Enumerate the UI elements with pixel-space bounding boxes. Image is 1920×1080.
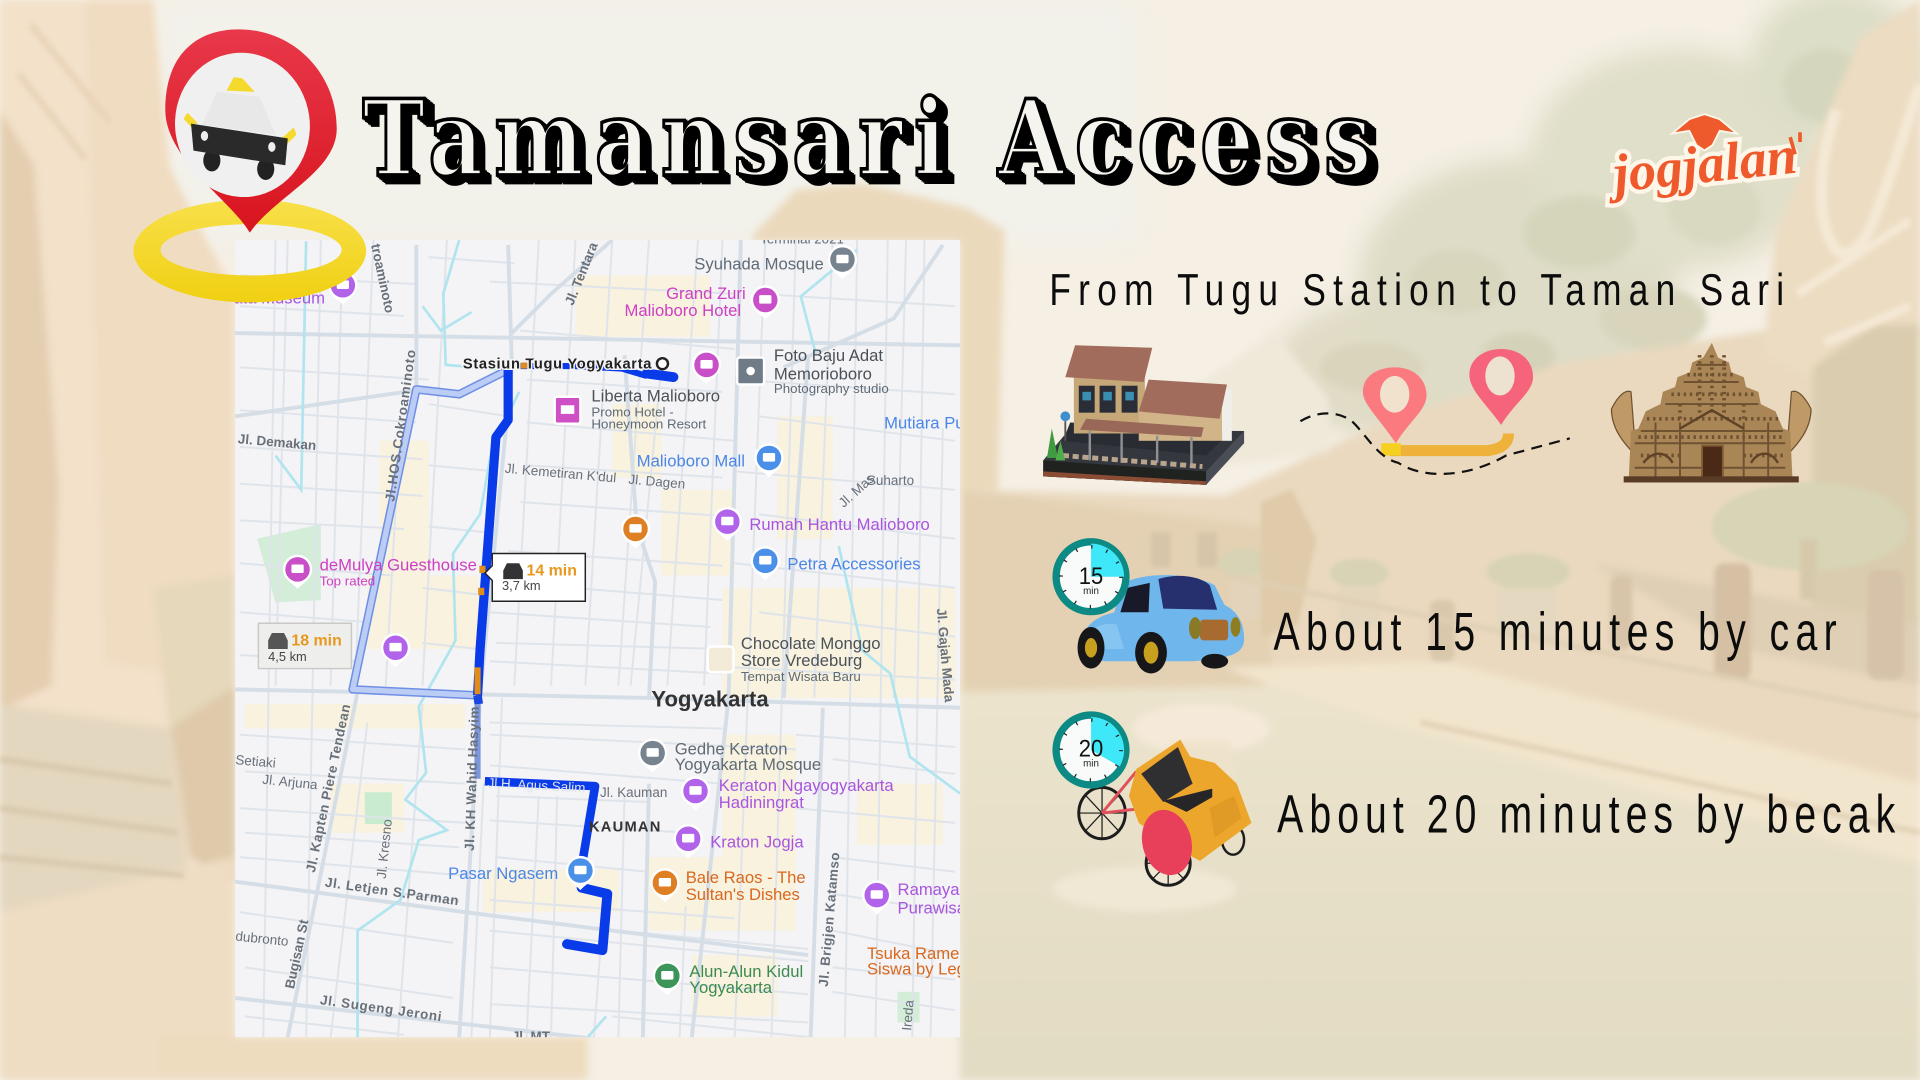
map place labels: Gedhe Keraton <box>675 739 788 758</box>
map street labels: Jl. Letjen S.Parman <box>324 875 460 908</box>
map place labels: KAUMAN <box>589 819 662 835</box>
map place labels: Photography studio <box>774 381 889 396</box>
route callout: 18 min: 4,5 km <box>268 649 307 664</box>
map rivers <box>276 240 960 1037</box>
route callout: 18 min: 18 min <box>291 632 342 649</box>
title: Tamansari Access <box>362 77 1371 201</box>
map pins <box>283 245 891 996</box>
map place labels: Kraton Jogja <box>710 832 804 851</box>
icon: blue car <box>1078 575 1244 673</box>
route callout: 14 min: 3,7 km <box>502 578 541 593</box>
map place labels: Chocolate Monggo <box>741 634 881 653</box>
map street labels: Jl. Brigjen Katamso <box>816 852 842 987</box>
map street labels: Ireda <box>899 999 917 1031</box>
icon: Tugu station building <box>1043 345 1244 485</box>
map place labels: Malioboro Hotel <box>624 301 741 320</box>
row: by car <box>1056 542 1837 673</box>
map place labels: Top rated <box>320 573 375 588</box>
route callout: 18 min <box>258 623 351 669</box>
map street labels: Jl. Gajah Mada <box>934 608 957 703</box>
map minor streets <box>240 240 955 1037</box>
main route <box>478 362 673 950</box>
icon: route pins with dashed path <box>1300 349 1570 474</box>
heading: from Tugu Station to Taman Sari: From Tugu Station to Taman Sari <box>1049 266 1784 315</box>
map street labels: Jl. Mas <box>836 471 878 510</box>
map place labels: Syuhada Mosque <box>694 254 824 273</box>
icon: 15 minute timer: min <box>1083 586 1099 597</box>
map street labels: Jl. Kapten Piere Tendean <box>303 703 353 874</box>
map street labels: Jl. Sugeng Jeroni <box>319 992 443 1024</box>
map place labels: Honeymoon Resort <box>591 417 707 432</box>
map place labels: Alun-Alun Kidul <box>689 962 803 981</box>
map place labels: Stasiun Tugu Yogyakarta <box>463 357 652 373</box>
map place labels: deMulya Guesthouse <box>320 556 477 575</box>
map street labels: Jl. Arjuna <box>262 772 319 792</box>
map place labels: Bale Raos - The <box>686 868 806 887</box>
route callout: 14 min <box>485 553 585 601</box>
map place labels: Malioboro Mall <box>637 452 745 471</box>
row: by becak <box>1056 715 1896 885</box>
alternative route <box>353 370 508 696</box>
map place labels: Pasar Ngasem <box>448 864 558 883</box>
map place labels: Grand Zuri <box>666 284 746 303</box>
map street labels: troaminoto <box>368 242 397 314</box>
map place labels: Memorioboro <box>774 365 872 384</box>
logo: jogjalan: jogjalan <box>1603 125 1799 204</box>
icon: 20 minute timer <box>1056 715 1126 785</box>
map street labels: Jl. Demakan <box>237 431 317 453</box>
map place labels: Tempat Wisata Baru <box>741 669 861 684</box>
map place labels: Purawisa <box>898 898 967 917</box>
map street labels: Jl. Kresno <box>374 818 395 879</box>
route callout: 14 min: 14 min <box>527 563 577 580</box>
map street labels: Setiaki <box>235 752 276 771</box>
icon: 15 minute timer <box>1056 542 1126 612</box>
map street labels: Bugisan St <box>282 918 312 990</box>
map place labels: Yogyakarta <box>651 687 769 712</box>
map street labels: Jl. Dagen <box>628 472 686 492</box>
map street labels: Jl.HOS.Cokroaminoto <box>382 349 419 502</box>
map street labels: Jl. KH Wahid Hasyim <box>462 706 482 851</box>
map street labels: dubronto <box>235 928 289 949</box>
map street labels: Jl.H. Agus Salim <box>487 775 586 795</box>
map place labels: Hadiningrat <box>719 793 804 812</box>
map place labels: Foto Baju Adat <box>774 346 883 365</box>
map place labels: Rumah Hantu Malioboro <box>749 515 930 534</box>
map place labels <box>206 232 969 997</box>
map place labels: Tsuka Rame <box>867 944 959 963</box>
text: about 15 minutes by car: About 15 minutes by car <box>1273 601 1837 662</box>
map street labels: Jl. MT <box>512 1029 551 1044</box>
icon: 20 minute timer: min <box>1083 759 1099 770</box>
map street labels: Jl. Kauman <box>600 785 667 800</box>
map street labels: Jl. Kemetiran K'dul <box>504 461 617 485</box>
map place labels: Siswa by Leg <box>867 960 966 979</box>
icon: becak <box>1079 740 1251 885</box>
map place labels: Wisata Museum <box>206 289 325 308</box>
map place labels: Terminal 2021 <box>760 232 844 247</box>
map street labels <box>235 240 957 1044</box>
map place labels: Liberta Malioboro <box>591 387 720 406</box>
map place labels: Keraton Ngayogyakarta <box>719 776 894 795</box>
map street labels: Suharto <box>867 473 914 488</box>
map panel <box>206 232 969 1044</box>
text: about 20 minutes by becak: About 20 minutes by becak <box>1277 783 1896 844</box>
map major roads <box>235 240 960 1041</box>
icon: taxi location pin on ring <box>133 29 366 302</box>
map place labels: Petra Accessories <box>787 554 921 573</box>
map land patches <box>245 276 955 1022</box>
map place labels: Store Vredeburg <box>741 651 862 670</box>
icon: 15 minute timer: 15 <box>1079 563 1103 590</box>
map place labels: Yogyakarta Mosque <box>675 755 821 774</box>
icon: Taman Sari gate <box>1611 343 1811 482</box>
map street labels: Jl. Tentara <box>562 240 601 307</box>
icon: 20 minute timer: 20 <box>1079 736 1103 763</box>
map place labels: Ramayan <box>898 880 969 899</box>
map place labels: Mutiara Pu <box>884 414 965 433</box>
map place labels: Yogyakarta <box>689 978 773 997</box>
map place labels: Sultan's Dishes <box>686 885 800 904</box>
map place labels: Promo Hotel - <box>591 404 674 419</box>
